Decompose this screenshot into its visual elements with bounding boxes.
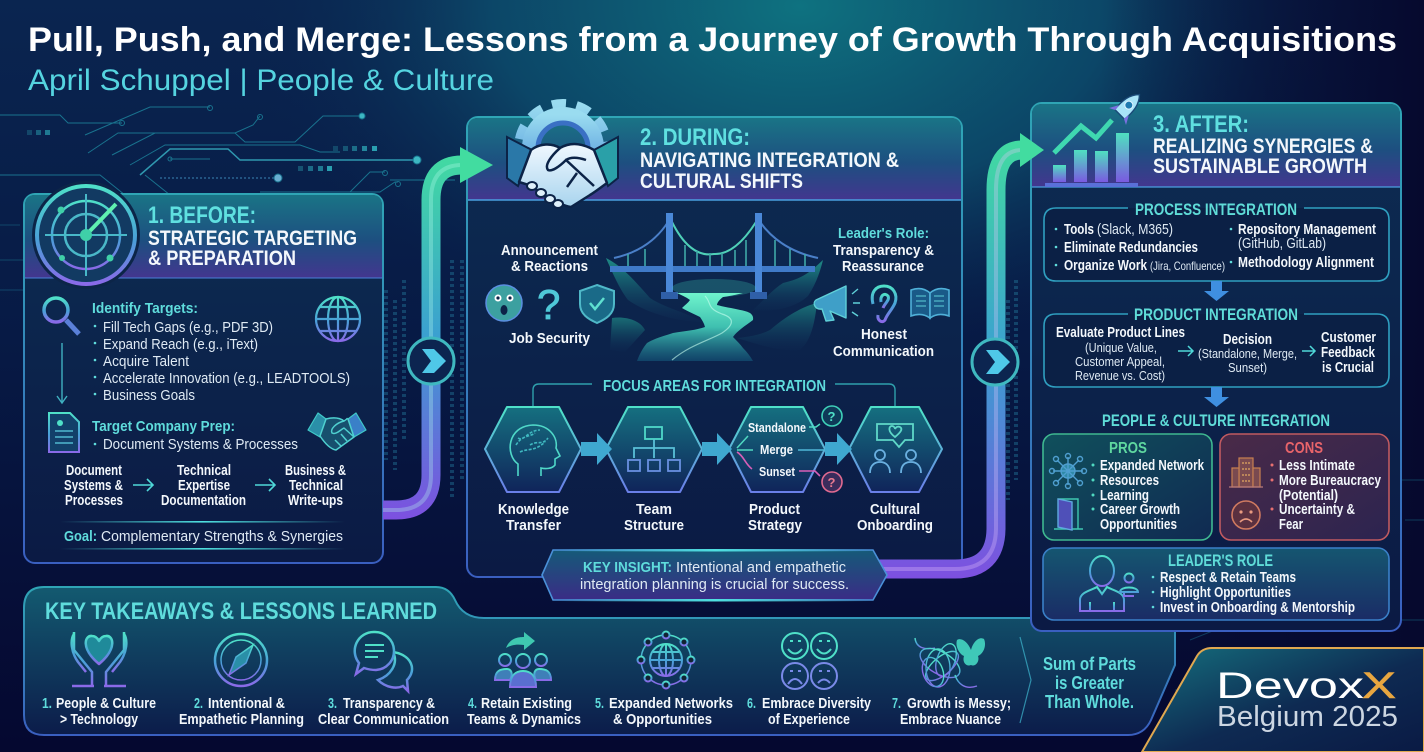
heading: before bbox=[148, 202, 357, 270]
takeaway 4: Retain Existing bbox=[481, 696, 572, 712]
hexagon: product strategy: Merge bbox=[760, 443, 793, 457]
box: pros: PROS bbox=[1109, 440, 1147, 457]
box: product integration: PRODUCT INTEGRATION bbox=[1134, 305, 1298, 324]
takeaway 6: 6. bbox=[747, 695, 756, 712]
box: cons: Uncertainty & bbox=[1279, 502, 1355, 518]
flow: documents: Document bbox=[66, 463, 122, 479]
hexagon: product strategy: Product bbox=[749, 502, 800, 518]
heading: key takeaways: KEY TAKEAWAYS & LESSONS LEARNED bbox=[45, 598, 437, 625]
text: identify targets: Acquire Talent bbox=[103, 354, 189, 370]
heading: during: NAVIGATING INTEGRATION & bbox=[640, 149, 899, 172]
logo: Devoxx Belgium 2025: Belgium 2025 bbox=[1217, 701, 1398, 733]
box: product integration: Evaluate Product Lines bbox=[1056, 325, 1185, 341]
icon: shield bbox=[580, 285, 614, 323]
takeaway 2: Empathetic Planning bbox=[179, 712, 304, 728]
icon: surprised face bbox=[486, 285, 522, 321]
takeaway 1: People & Culture bbox=[56, 696, 156, 712]
box: process integration: (Slack, M365) bbox=[1097, 222, 1173, 238]
logo: Devoxx Belgium 2025 bbox=[1142, 648, 1424, 752]
text: identify targets bbox=[92, 300, 350, 404]
flow: documents: Technical bbox=[289, 478, 343, 494]
flow: documents: Processes bbox=[65, 493, 123, 509]
takeaway 4: Teams & Dynamics bbox=[467, 712, 581, 728]
box: process integration: Organize Work bbox=[1064, 258, 1148, 274]
text: identify targets: Identify Targets: bbox=[92, 300, 198, 317]
sum of parts: is Greater bbox=[1055, 673, 1124, 693]
takeaway 5: & Opportunities bbox=[613, 712, 712, 728]
takeaway 4 bbox=[467, 632, 581, 728]
icon: chevron circle two bbox=[972, 339, 1018, 385]
takeaway 2: 2. bbox=[194, 695, 203, 712]
box: product integration: Customer bbox=[1321, 330, 1376, 346]
icon: document bbox=[49, 413, 79, 452]
icon: book bbox=[911, 289, 949, 318]
sum of parts: Than Whole. bbox=[1045, 692, 1134, 712]
goal: Goal: bbox=[64, 528, 97, 545]
box: leader's role bbox=[1043, 548, 1389, 620]
takeaway 5: Expanded Networks bbox=[609, 696, 733, 712]
box: product integration: is Crucial bbox=[1322, 360, 1374, 376]
flow: documents: Systems & bbox=[64, 478, 123, 494]
takeaway 7: 7. bbox=[892, 695, 901, 712]
icon: question pink: ? bbox=[828, 475, 836, 490]
heading: before: 1. BEFORE: bbox=[148, 202, 256, 229]
box: process integration: Tools bbox=[1064, 222, 1094, 238]
takeaway 3: 3. bbox=[328, 695, 337, 712]
title: Pull, Push, and Merge: Lessons from a Journey of Growth Through Acquisitions bbox=[28, 21, 1397, 59]
heading: after bbox=[1153, 111, 1373, 178]
flow: documents: Expertise bbox=[178, 478, 230, 494]
box: cons: CONS bbox=[1285, 440, 1323, 457]
hexagon: product strategy: Standalone bbox=[748, 421, 806, 435]
icon: ear bbox=[872, 286, 896, 322]
takeaway 7: Growth is Messy; bbox=[907, 696, 1011, 712]
text: announcement and reactions: & Reactions bbox=[511, 259, 588, 275]
box: pros: Resources bbox=[1100, 473, 1159, 489]
takeaway 3 bbox=[318, 632, 449, 728]
takeaway 3: Clear Communication bbox=[318, 712, 449, 728]
text: identify targets: Accelerate Innovation (e.g., LEADTOOLS) bbox=[103, 371, 350, 387]
callout: key insight bbox=[542, 549, 887, 602]
takeaway 6: Embrace Diversity bbox=[762, 696, 871, 712]
box: cons: (Potential) bbox=[1279, 488, 1338, 504]
text: leader's role: Leader's Role: bbox=[838, 226, 929, 242]
box: leader's role: Highlight Opportunities bbox=[1160, 585, 1291, 601]
icon: megaphone bbox=[814, 286, 860, 321]
icon: question teal: ? bbox=[828, 409, 836, 424]
arrow: product to cultural bbox=[825, 433, 852, 465]
text: leader's role bbox=[814, 226, 949, 360]
text: leader's role: Communication bbox=[833, 344, 934, 360]
icon: chevron circle one bbox=[408, 338, 454, 384]
box: leader's role: Respect & Retain Teams bbox=[1160, 570, 1296, 586]
heading: during: CULTURAL SHIFTS bbox=[640, 170, 803, 193]
sum of parts: Sum of Parts bbox=[1043, 654, 1136, 674]
takeaway 2 bbox=[179, 634, 304, 728]
box: process integration: Repository Management bbox=[1238, 222, 1376, 238]
text: leader's role: Honest bbox=[861, 327, 907, 343]
callout: key insight: KEY INSIGHT: bbox=[583, 559, 672, 576]
hexagon: cultural onboarding bbox=[849, 407, 942, 534]
box: product integration: Decision bbox=[1223, 332, 1272, 348]
takeaway 6 bbox=[747, 633, 871, 728]
box: pros: Career Growth bbox=[1100, 502, 1180, 518]
icon: growth chart and rocket bbox=[1045, 86, 1148, 187]
text: target company prep bbox=[92, 418, 298, 453]
box: pros: Learning bbox=[1100, 488, 1149, 504]
hexagon: product strategy: Sunset bbox=[759, 465, 796, 479]
flow: documents: Technical bbox=[177, 463, 231, 479]
box: process integration: PROCESS INTEGRATION bbox=[1135, 200, 1297, 219]
heading: before: STRATEGIC TARGETING bbox=[148, 227, 357, 250]
box: cons: Less Intimate bbox=[1279, 458, 1355, 474]
box: pros: Opportunities bbox=[1100, 517, 1177, 533]
hexagon: cultural onboarding: Cultural bbox=[870, 502, 920, 518]
takeaway 1: 1. bbox=[42, 695, 52, 712]
hexagon: knowledge transfer: Knowledge bbox=[498, 502, 569, 518]
takeaway 1: > Technology bbox=[60, 712, 138, 728]
icon: radar bbox=[32, 181, 140, 289]
takeaway 1 bbox=[42, 632, 156, 728]
heading: before: & PREPARATION bbox=[148, 247, 296, 270]
hexagon: team structure bbox=[606, 407, 702, 534]
hexagon: cultural onboarding: Onboarding bbox=[857, 518, 933, 534]
arrow: during to after bbox=[860, 133, 1044, 569]
box: leader's role: LEADER'S ROLE bbox=[1168, 551, 1273, 570]
takeaway 6: of Experience bbox=[768, 712, 850, 728]
hexagon: knowledge transfer bbox=[485, 407, 581, 534]
logo: Devoxx Belgium 2025: Devox bbox=[1216, 665, 1365, 706]
text: announcement and reactions bbox=[486, 243, 614, 347]
arrow: team to product bbox=[702, 433, 732, 465]
takeaway 7 bbox=[892, 638, 1011, 728]
box: process integration: (Jira, Confluence) bbox=[1150, 259, 1225, 273]
panel 1: before bbox=[24, 181, 383, 563]
flow: documents: Business & bbox=[285, 463, 346, 479]
icon: question mark: ? bbox=[537, 281, 560, 328]
takeaway 7: Embrace Nuance bbox=[900, 712, 1001, 728]
heading: focus areas: FOCUS AREAS FOR INTEGRATION bbox=[603, 378, 826, 395]
heading: during: 2. DURING: bbox=[640, 124, 750, 151]
arrow: knowledge to team bbox=[581, 433, 612, 465]
box: product integration: Sunset) bbox=[1228, 360, 1267, 375]
box: product integration: Revenue vs. Cost) bbox=[1075, 368, 1165, 383]
panel 3: after bbox=[1031, 86, 1401, 631]
heading: focus areas bbox=[533, 378, 895, 406]
hexagon: team structure: Team bbox=[636, 502, 672, 518]
takeaway 2: Intentional & bbox=[208, 696, 285, 712]
takeaway 4: 4. bbox=[468, 695, 477, 712]
icon: network bbox=[1050, 454, 1086, 488]
box: process integration: Methodology Alignment bbox=[1238, 255, 1374, 271]
arrow: down bbox=[57, 343, 67, 403]
heading: after: REALIZING SYNERGIES & bbox=[1153, 135, 1373, 158]
icon: sad face bbox=[1232, 501, 1260, 529]
arrow: process to product bbox=[1204, 281, 1229, 301]
box: cons bbox=[1220, 434, 1389, 540]
heading: after: 3. AFTER: bbox=[1153, 111, 1249, 138]
icon: gear handshake bbox=[507, 104, 618, 208]
box: leader's role: Invest in Onboarding & Mentorship bbox=[1160, 600, 1355, 616]
box: product integration: Customer Appeal, bbox=[1075, 354, 1165, 369]
text: announcement and reactions: Announcement bbox=[501, 243, 598, 259]
icon: door bbox=[1054, 499, 1083, 530]
box: cons: Fear bbox=[1279, 517, 1303, 533]
box: pros bbox=[1043, 434, 1212, 540]
text: identify targets: Expand Reach (e.g., iText) bbox=[103, 337, 258, 353]
text: leader's role: Transparency & bbox=[833, 243, 934, 259]
heading: people and culture: PEOPLE & CULTURE INTEGRATION bbox=[1102, 411, 1330, 430]
sum of parts bbox=[1043, 654, 1136, 712]
box: pros: Expanded Network bbox=[1100, 458, 1205, 474]
text: announcement and reactions: Job Security bbox=[509, 331, 590, 347]
hexagon: product strategy: Strategy bbox=[748, 518, 802, 534]
box: process integration: Eliminate Redundancies bbox=[1064, 240, 1198, 256]
text: target company prep: Document Systems & Processes bbox=[103, 437, 298, 453]
text: identify targets: Business Goals bbox=[103, 388, 195, 404]
flow: documents: Write-ups bbox=[288, 493, 343, 509]
goal: Complementary Strengths & Synergies bbox=[101, 529, 343, 545]
text: identify targets: Fill Tech Gaps (e.g., PDF 3D) bbox=[103, 320, 273, 336]
icon: magnifier bbox=[44, 298, 79, 334]
takeaway 5: 5. bbox=[595, 695, 604, 712]
subtitle: April Schuppel | People & Culture bbox=[28, 64, 494, 97]
box: product integration: (Unique Value, bbox=[1085, 340, 1157, 355]
hexagon: team structure: Structure bbox=[624, 518, 684, 534]
hexagon: knowledge transfer: Transfer bbox=[506, 518, 561, 534]
heading: during bbox=[640, 124, 899, 193]
text: leader's role: Reassurance bbox=[842, 259, 924, 275]
heading: after: SUSTAINABLE GROWTH bbox=[1153, 155, 1367, 178]
panel 2: during bbox=[467, 104, 962, 577]
hexagon: product strategy bbox=[729, 406, 842, 534]
arrow: product to people bbox=[1204, 387, 1229, 407]
icon: building bbox=[1229, 458, 1263, 487]
box: product integration: (Standalone, Merge, bbox=[1198, 346, 1297, 361]
box: process integration bbox=[1044, 200, 1389, 281]
icon: handshake small bbox=[308, 413, 366, 450]
arrow: before to during bbox=[383, 147, 493, 510]
icon: globe bbox=[316, 297, 360, 341]
text: target company prep: Target Company Prep: bbox=[92, 418, 235, 435]
box: product integration: Feedback bbox=[1321, 345, 1376, 361]
illustration: bridge and river bbox=[606, 213, 823, 361]
takeaway 3: Transparency & bbox=[343, 696, 435, 712]
box: process integration: (GitHub, GitLab) bbox=[1238, 236, 1326, 252]
callout: key insight: integration planning is crucial for success. bbox=[580, 576, 849, 593]
callout: key insight: Intentional and empathetic bbox=[676, 559, 846, 576]
logo: Devoxx Belgium 2025: X bbox=[1362, 665, 1396, 706]
icon: leader person bbox=[1080, 556, 1138, 611]
box: product integration bbox=[1044, 305, 1389, 387]
panel: key takeaways bbox=[24, 587, 1175, 735]
takeaway 5 bbox=[595, 632, 733, 728]
flow: documents: Documentation bbox=[161, 493, 246, 509]
box: cons: More Bureaucracy bbox=[1279, 473, 1381, 489]
flow: documents bbox=[64, 463, 346, 509]
